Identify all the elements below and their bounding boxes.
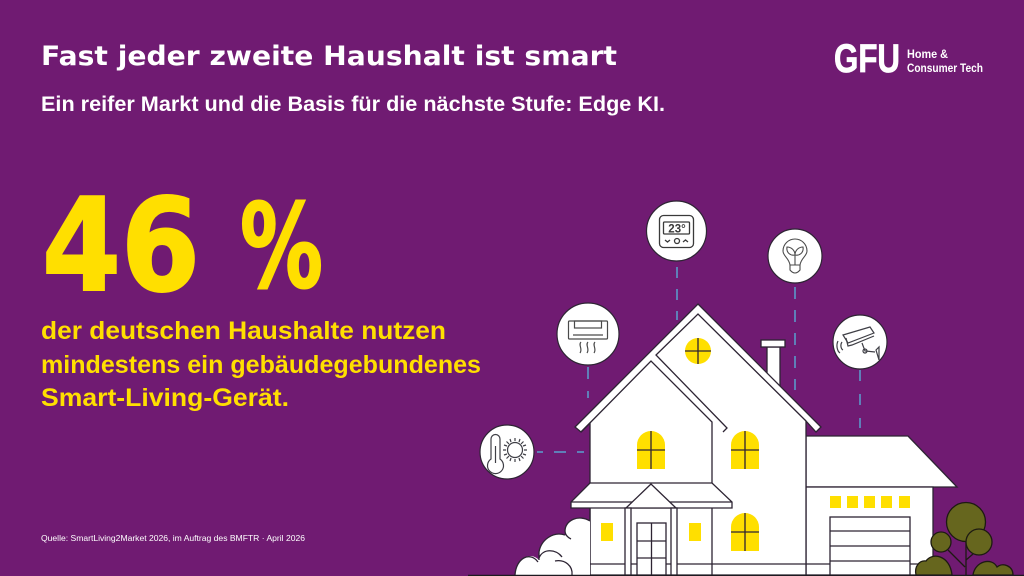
description text: Smart-Living-Gerät.	[41, 384, 289, 412]
porch	[571, 483, 806, 575]
arched windows	[637, 431, 759, 551]
logo: GFU Home & Consumer Tech: GFU	[834, 37, 900, 81]
description text: mindestens ein gebäudegebundenes	[41, 351, 481, 379]
icon: air conditioner	[557, 303, 619, 365]
bushes left	[515, 518, 590, 575]
icon: thermometer and sun	[480, 425, 534, 479]
illustration: house	[571, 304, 957, 575]
icon: light bulb	[768, 229, 822, 283]
title: Fast jeder zweite Haushalt ist smart	[41, 41, 617, 72]
ground line	[468, 574, 1024, 576]
logo: GFU Home & Consumer Tech	[834, 37, 983, 81]
icon: thermostat: 23°	[668, 224, 686, 236]
icon: thermostat	[646, 201, 706, 261]
icon: security camera	[833, 315, 887, 369]
description text	[41, 317, 481, 412]
chimney	[761, 340, 785, 389]
logo: GFU Home & Consumer Tech: Home &	[907, 49, 948, 61]
description text: der deutschen Haushalte nutzen	[41, 317, 446, 345]
big number: 46 %: %	[240, 180, 323, 315]
subtitle: Ein reifer Markt und die Basis für die nächste Stufe: Edge KI.	[41, 93, 665, 116]
connector lines	[537, 267, 860, 452]
logo: GFU Home & Consumer Tech: Consumer Tech	[907, 63, 983, 75]
source note: Quelle: SmartLiving2Market 2026, im Auftrag des BMFTR · April 2026	[41, 533, 305, 543]
big number: 46 %: 46	[42, 172, 200, 321]
big number: 46 %	[42, 172, 323, 321]
round window	[685, 338, 711, 364]
garage	[806, 436, 957, 575]
roof lines	[581, 314, 806, 483]
trees right	[916, 502, 1013, 575]
main building silhouette with roof	[575, 304, 821, 575]
